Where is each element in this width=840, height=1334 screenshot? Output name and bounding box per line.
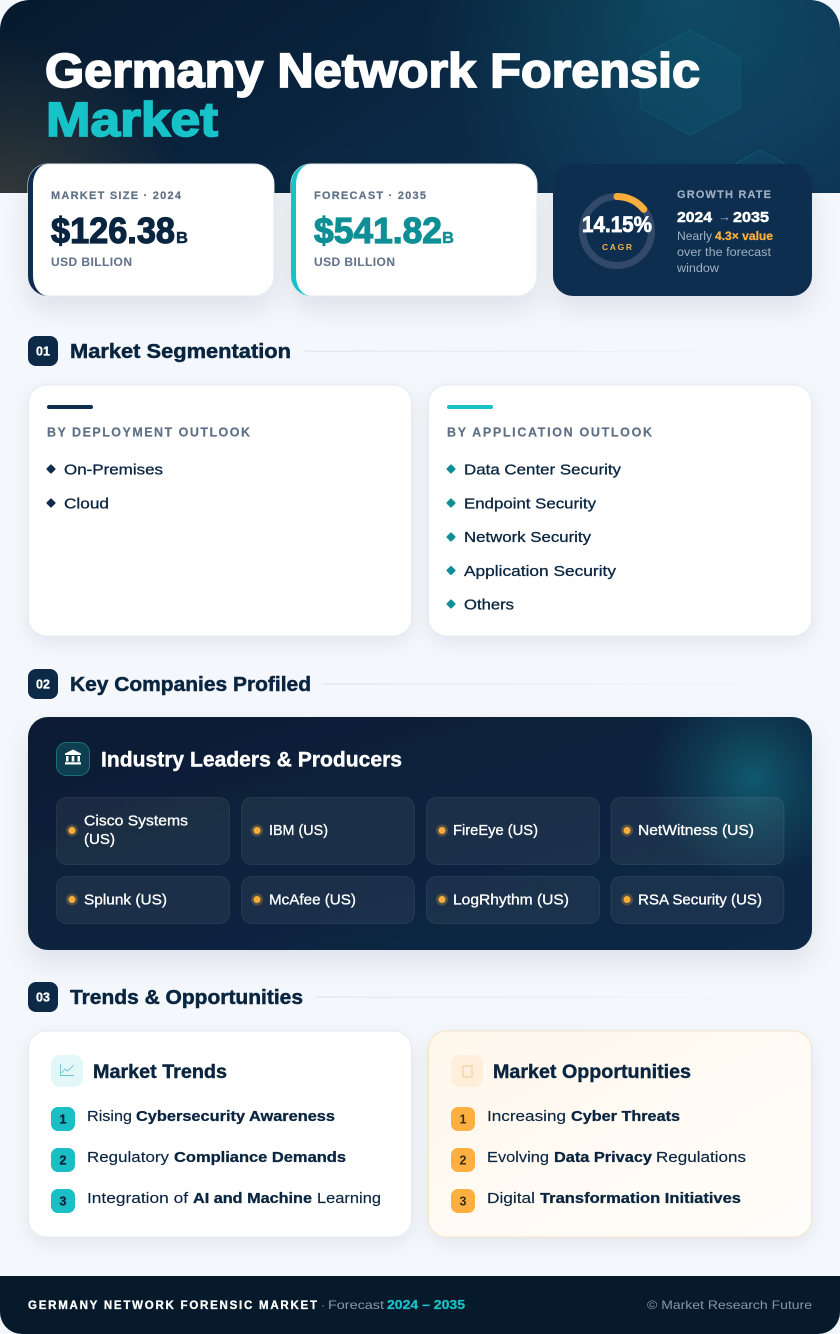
trend item 2: 2: [60, 1154, 67, 1168]
opportunity item 3: [451, 1189, 741, 1213]
stat card: growth rate: Nearly: [677, 231, 712, 243]
list item: Cloud: [64, 496, 109, 512]
section heading: market segmentation: Market Segmentation: [70, 340, 291, 363]
company chip: IBM: [242, 798, 414, 864]
opportunity item 3: Transformation Initiatives: [540, 1190, 741, 1207]
section heading: trends and opportunities: Trends & Opportunities: [70, 986, 303, 1009]
footer: GERMANY NETWORK FORENSIC MARKET: [28, 1300, 317, 1312]
footer: 2024 – 2035: [387, 1298, 465, 1312]
icon: line chart: [51, 1055, 83, 1087]
trend item 2: [51, 1148, 346, 1172]
list item: On-Premises: [64, 462, 163, 478]
opportunity item 3: Digital: [487, 1190, 535, 1207]
stat card: market size 2024: $126.38: [51, 210, 175, 251]
stat card: market size 2024: B: [176, 230, 188, 247]
opportunity item 2: 2: [460, 1154, 467, 1168]
stat card: growth rate: window: [676, 263, 720, 275]
footer: © Market Research Future: [647, 1298, 812, 1312]
company chip: IBM: IBM (US): [269, 823, 328, 839]
company chip: RSA Security: [611, 876, 784, 924]
stat card: growth rate: 2024: [677, 209, 713, 226]
stat card: growth rate: →: [718, 209, 731, 224]
trend item 2: Compliance Demands: [174, 1149, 346, 1166]
company chip: LogRhythm: LogRhythm (US): [453, 892, 569, 908]
company chip: McAfee: McAfee (US): [269, 892, 356, 908]
opportunity item 1: Increasing: [487, 1108, 566, 1125]
title: Germany Network Forensic: [45, 45, 700, 98]
trend item 3: 3: [60, 1194, 67, 1208]
trend item 1: Cybersecurity Awareness: [136, 1108, 335, 1125]
trend item 3: [51, 1189, 381, 1213]
list item: Data Center Security: [464, 462, 622, 478]
stat card: growth rate: 2035: [733, 209, 769, 226]
company chip: LogRhythm: [426, 876, 600, 924]
panel: by deployment outlook: [28, 385, 412, 636]
panel heading: Market Opportunities: [493, 1062, 691, 1083]
panel heading: Industry Leaders & Producers: [101, 748, 402, 772]
list item: Others: [464, 596, 514, 614]
company chip: McAfee: [242, 876, 414, 924]
section heading: key companies: 02: [36, 678, 50, 692]
list item: Application Security: [464, 563, 617, 580]
list item: [46, 496, 109, 512]
company chip: Splunk: Splunk (US): [84, 892, 167, 908]
decorative hexagon: [640, 30, 740, 135]
section heading: trends and opportunities: 03: [36, 990, 50, 1004]
opportunity item 2: [451, 1148, 746, 1172]
company chip: RSA Security: RSA Security (US): [638, 892, 762, 908]
icon: bank building: [56, 742, 90, 776]
opportunity item 2: Regulations: [656, 1149, 746, 1166]
panel: market opportunities: [428, 1031, 812, 1237]
header banner: [0, 0, 840, 237]
stat card: forecast 2035: [291, 164, 537, 296]
section heading: trends and opportunities: [28, 982, 812, 1012]
section heading: key companies: [28, 669, 812, 699]
stat card: forecast 2035: $541.82: [314, 210, 442, 251]
company chip: Splunk: [56, 876, 230, 924]
company chip: Cisco: Cisco Systems: [84, 814, 188, 830]
title: Market: [46, 94, 218, 147]
panel: by deployment outlook: BY DEPLOYMENT OUTLOOK: [47, 426, 250, 440]
opportunity item 3: 3: [460, 1194, 467, 1208]
stat card: growth rate: over the forecast: [677, 247, 772, 259]
trend item 3: Learning: [317, 1190, 381, 1207]
opportunity item 1: 1: [460, 1112, 467, 1126]
list item: Network Security: [464, 529, 592, 546]
section heading: market segmentation: [28, 336, 812, 366]
opportunity item 2: Data Privacy: [554, 1149, 653, 1166]
donut chart: CAGR: 14.15%: [582, 212, 652, 237]
list item: [446, 596, 514, 614]
list item: Endpoint Security: [464, 496, 597, 512]
company chip: FireEye: FireEye (US): [453, 823, 538, 839]
footer: ·: [321, 1298, 325, 1312]
stat card: market size 2024: USD BILLION: [51, 255, 132, 269]
stat card: growth rate: 4.3× value: [715, 231, 773, 243]
stat card: forecast 2035: FORECAST · 2035: [314, 190, 426, 202]
panel heading: Market Trends: [93, 1062, 227, 1083]
title: [45, 45, 700, 147]
opportunity item 1: Cyber Threats: [571, 1108, 680, 1125]
company chip: Cisco: (US): [84, 832, 115, 848]
company chip: Cisco: [56, 798, 230, 864]
panel: by application outlook: BY APPLICATION OUTLOOK: [447, 426, 652, 440]
stat card: market size 2024: MARKET SIZE · 2024: [51, 190, 182, 202]
trend item 3: Integration of: [87, 1190, 189, 1207]
stat card: market size 2024: [28, 164, 274, 296]
panel: market trends: [28, 1031, 412, 1237]
company chip: FireEye: [426, 798, 600, 864]
trend item 1: Rising: [87, 1108, 132, 1125]
trend item 2: Regulatory: [87, 1149, 170, 1166]
panel: industry leaders: [28, 717, 812, 950]
company chip: NetWitness: [611, 798, 784, 864]
stat card: growth rate: [553, 164, 812, 296]
donut chart: CAGR: CAGR: [602, 242, 632, 252]
stat card: forecast 2035: USD BILLION: [314, 255, 395, 269]
footer: [0, 1276, 840, 1334]
stat card: forecast 2035: B: [442, 230, 454, 247]
panel: by application outlook: [428, 385, 812, 636]
donut chart: CAGR: [582, 196, 652, 266]
company chip: NetWitness: NetWitness (US): [638, 823, 754, 839]
section heading: key companies: Key Companies Profiled: [70, 673, 311, 696]
section heading: market segmentation: 01: [36, 344, 50, 358]
trend item 1: 1: [60, 1112, 67, 1126]
footer: Forecast: [328, 1298, 385, 1312]
opportunity item 2: Evolving: [487, 1149, 549, 1166]
icon: missing glyph box: [451, 1055, 483, 1087]
trend item 3: AI and Machine: [193, 1190, 312, 1207]
stat card: growth rate: GROWTH RATE: [677, 189, 771, 201]
opportunity item 1: [451, 1107, 680, 1131]
decorative hexagon small: [720, 150, 800, 237]
trend item 1: [51, 1107, 335, 1131]
